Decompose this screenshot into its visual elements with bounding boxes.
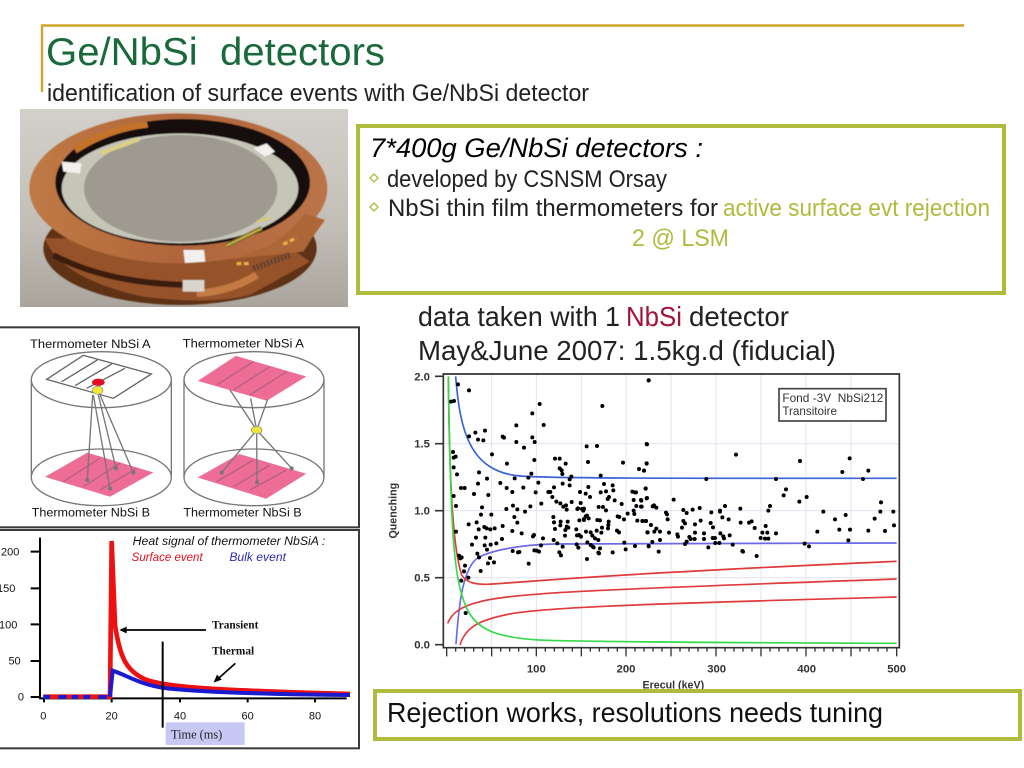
text block: data taken: May&June 2007: 1.5kg.d (fiducial) <box>418 335 836 366</box>
axis numbers: 100 <box>527 664 546 676</box>
axis labels: 40 <box>174 710 186 722</box>
frame and ticks <box>435 374 899 648</box>
callout: conclusion <box>375 691 1020 739</box>
bullet two <box>370 195 990 222</box>
chart: quenching versus recoil energy scatter <box>388 371 906 691</box>
axis numbers: 0.5 <box>414 573 430 585</box>
axis numbers: 500 <box>887 664 906 676</box>
legend box <box>779 389 886 421</box>
thermometer labels: Thermometer NbSi B <box>183 506 302 520</box>
thermometer labels: Thermometer NbSi B <box>32 506 150 520</box>
x axis title: Erecul (keV) <box>643 679 705 691</box>
legend box: Transitoire <box>782 405 837 418</box>
bullet two: NbSi thin film thermometers for <box>388 195 718 222</box>
arrow heads on lower plates <box>87 468 292 488</box>
chart: heat signal versus time <box>0 530 359 748</box>
axis labels: 20 <box>106 710 118 722</box>
arrow: transient <box>119 619 259 633</box>
photo: Ge/NbSi detector in copper holder <box>20 109 348 307</box>
scatter points <box>451 380 649 613</box>
axes <box>31 538 347 702</box>
legend box: Fond -3V NbSi212 <box>782 392 883 405</box>
curve: lower blue <box>456 543 897 644</box>
axis labels: 50 <box>8 656 21 668</box>
axis numbers: 2.0 <box>414 371 430 383</box>
panel: detector description <box>358 126 1004 293</box>
bullet one: developed by CSNSM Orsay <box>387 166 667 193</box>
chart heading and legend: Bulk event <box>229 550 287 564</box>
text block: data taken: detector <box>689 301 789 332</box>
text block: data taken: NbSi <box>626 301 682 332</box>
curve: red middle <box>448 579 897 623</box>
axis title: Time (ms) <box>171 727 222 741</box>
axis labels: 60 <box>242 710 254 722</box>
curve: upper blue <box>456 376 897 478</box>
left cylinder: surface event <box>31 352 171 506</box>
thermometer labels: Thermometer NbSi A <box>30 337 151 351</box>
subtitle: identification of surface events with Ge/NbSi detector <box>47 80 589 107</box>
text block: data taken: data taken with 1 <box>418 301 620 332</box>
chart heading and legend: Surface event <box>132 550 203 564</box>
title rule: gold corner line <box>42 26 964 92</box>
axis numbers: 400 <box>797 664 816 676</box>
text block: data taken <box>418 301 836 366</box>
chart heading and legend: Heat signal of thermometer NbSiA : <box>133 534 325 548</box>
arrow: thermal <box>212 645 254 683</box>
divider between transient and thermal <box>160 642 166 728</box>
series: surface event <box>43 541 350 697</box>
callout: conclusion: Rejection works, resolutions needs tuning <box>387 697 883 728</box>
series: bulk event <box>43 671 350 697</box>
curve: red upper <box>448 376 897 584</box>
axis labels: 0 <box>18 692 24 704</box>
bullet two: active surface evt rejection <box>723 195 990 222</box>
axis labels: 200 <box>1 547 19 559</box>
thermometer labels: Thermometer NbSi A <box>183 336 304 350</box>
axis labels: 80 <box>309 710 321 722</box>
thermometer labels <box>30 336 304 520</box>
axis numbers: 200 <box>617 664 635 676</box>
axis numbers: 300 <box>707 664 726 676</box>
axis numbers: 1.5 <box>414 439 430 451</box>
curve: green <box>448 376 897 643</box>
axis numbers: 1.0 <box>414 506 430 518</box>
axis title <box>166 722 245 745</box>
axis numbers: 0.0 <box>414 640 430 652</box>
axis labels <box>0 547 321 722</box>
arrow: transient: Transient <box>212 619 259 631</box>
heading: detector mass: 7*400g Ge/NbSi detectors : <box>370 133 703 163</box>
chart heading and legend <box>132 534 325 564</box>
y axis title: Quenching <box>388 483 400 538</box>
scatter points continued <box>641 380 894 556</box>
title: Ge/NbSi detectors <box>46 31 385 74</box>
arrow: thermal: Thermal <box>212 645 254 657</box>
note: two at LSM: 2 @ LSM <box>632 225 729 252</box>
curve: red lower <box>460 597 897 645</box>
grid <box>443 374 900 648</box>
axis labels: 0 <box>40 710 46 722</box>
right cylinder: bulk event <box>184 352 324 506</box>
diagram: thermometer cylinders <box>0 327 359 527</box>
axis numbers <box>414 371 906 676</box>
